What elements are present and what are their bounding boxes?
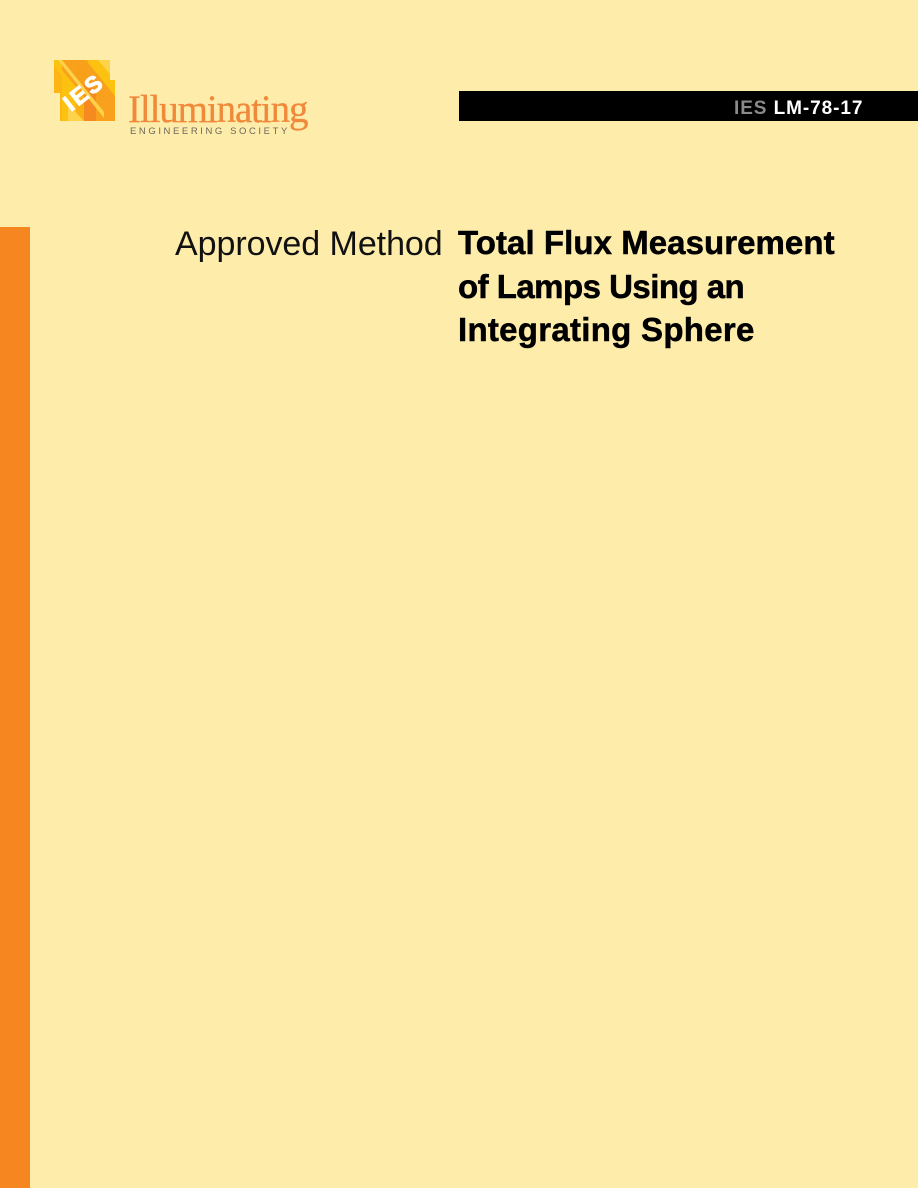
document number bar	[459, 91, 918, 121]
title: Integrating Sphere	[458, 311, 755, 348]
orange side bar	[0, 227, 30, 1188]
title: Total Flux Measurement	[458, 224, 835, 261]
logo: wordmark Illuminating: Illuminating	[128, 88, 307, 131]
document number: IES LM-78-17	[734, 98, 863, 119]
title: of Lamps Using an	[458, 268, 744, 304]
logo: IES emblem	[54, 60, 115, 121]
logo: IES emblem: IES	[58, 68, 109, 116]
label: Approved Method: Approved Method	[175, 225, 443, 263]
title	[458, 224, 835, 348]
logo: Engineering Society: ENGINEERING SOCIETY	[130, 126, 290, 137]
